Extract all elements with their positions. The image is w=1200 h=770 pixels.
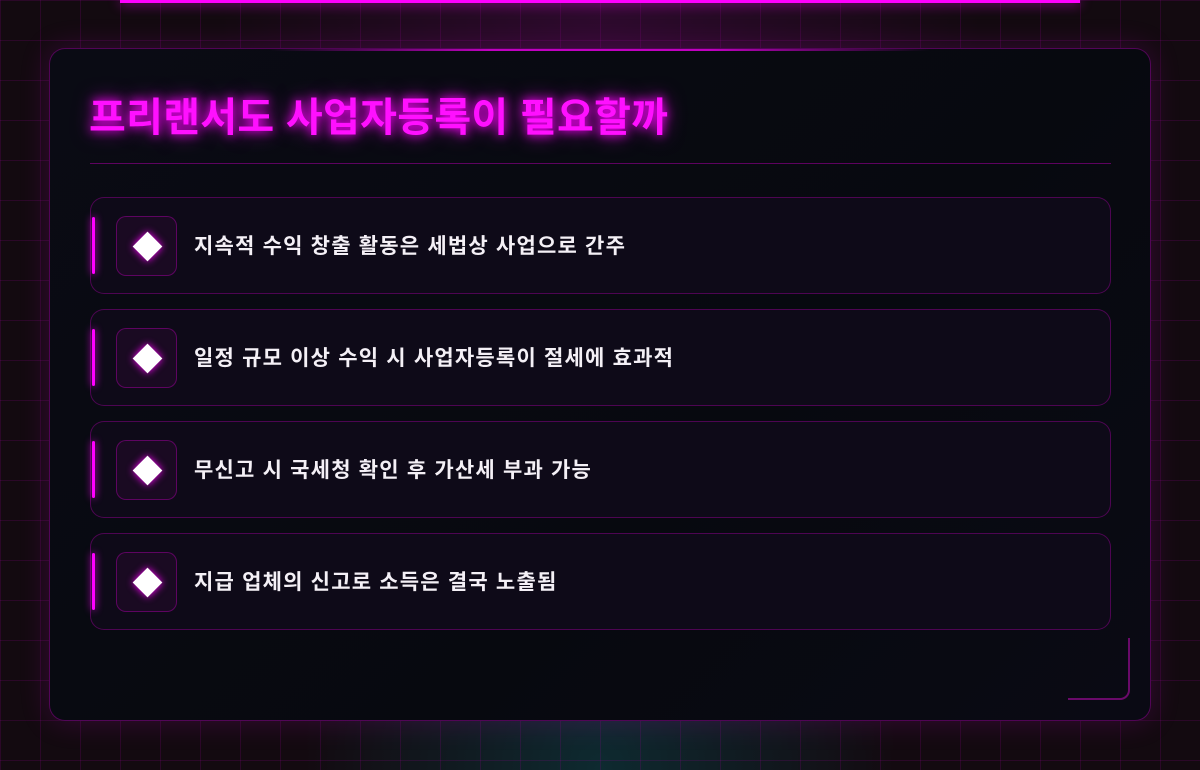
text 4: 지급 업체의 신고로 소득은 결국 노출됨 <box>194 571 558 594</box>
icon: diamond <box>116 552 177 612</box>
item 2 <box>90 309 1111 406</box>
text 1: 지속적 수익 창출 활동은 세법상 사업으로 간주 <box>194 235 626 258</box>
icon: diamond <box>116 328 177 388</box>
corner accent <box>1068 638 1130 700</box>
text 3: 무신고 시 국세청 확인 후 가산세 부과 가능 <box>194 459 592 482</box>
item 4 <box>90 533 1111 630</box>
item 1 <box>90 197 1111 294</box>
icon: diamond <box>116 216 177 276</box>
text 2: 일정 규모 이상 수익 시 사업자등록이 절세에 효과적 <box>194 347 674 370</box>
item 3 <box>90 421 1111 518</box>
icon: diamond <box>116 440 177 500</box>
title: 프리랜서도 사업자등록이 필요할까 <box>89 96 668 140</box>
